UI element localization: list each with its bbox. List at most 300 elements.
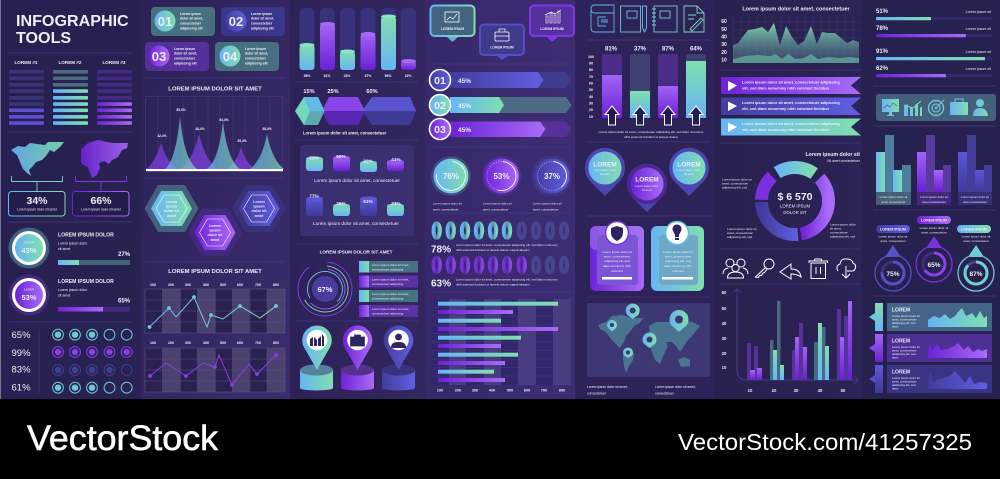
card: security: amet, consectetuer <box>604 254 630 258</box>
progress bars <box>876 9 992 77</box>
panel: small cylinders: 26% <box>336 201 347 206</box>
numbered cards 01-04: consectetuer <box>180 22 202 26</box>
speech bubble: briefcase <box>480 24 524 60</box>
panel: small cylinders: 33% <box>391 201 402 206</box>
arrow bar chart: 60 <box>589 82 593 86</box>
isometric blocks: 60% <box>366 89 378 95</box>
ribbons: Lorem ipsum dolor sit amet, consectetuer adipiscing <box>742 121 840 126</box>
hexagon: purple <box>188 209 242 256</box>
drop gauge 87% <box>957 225 994 291</box>
ribbons: elit, sed diam nonummy nibh euismod tincidun <box>742 127 830 132</box>
numbered cards 01-04: adipiscing elit <box>180 26 203 30</box>
cylinder chart: 33% <box>344 74 350 78</box>
card: security <box>590 222 644 291</box>
drop gauge 65%: Lorem ipsum dolor sit <box>920 226 948 230</box>
map callout: north america 34%: 34% <box>26 195 48 207</box>
area chart: 40 <box>721 34 727 40</box>
arrow bar chart <box>588 46 706 139</box>
arrow bar chart: 87% <box>662 46 675 52</box>
legend boxes: Lorem ipsum dolor sit amet, <box>372 292 409 296</box>
peak chart: 64,4% <box>219 118 229 122</box>
donut $6 570: sit amet, <box>830 226 842 230</box>
horizontal bar chart: 100 <box>437 388 443 392</box>
area row: teal: amet, consectetuer <box>892 318 917 322</box>
line chart: teal <box>145 269 285 333</box>
isometric blocks <box>295 89 416 136</box>
ribbons: elit, sed diam nonummy nibh euismod tincidun <box>742 106 830 111</box>
arrow bars 01-03: 45% <box>458 78 471 85</box>
panel: small cylinders: 66% <box>336 154 347 159</box>
line chart: teal: 800 <box>273 283 279 287</box>
horizontal bar chart: 300 <box>472 388 478 392</box>
panel: stacked lorem bars: LOREM #1 <box>15 60 38 65</box>
horizontal bar chart: 800 <box>559 388 565 392</box>
grouped bar chart: 20 <box>772 388 777 393</box>
area row: teal: LOREM <box>892 308 910 314</box>
speech bubble: briefcase: LOREM IPSUM <box>490 46 514 50</box>
hexagon: purple: amet <box>211 238 220 242</box>
numbered cards 01-04: 04 <box>223 49 238 64</box>
radial chart 67%: LOREM IPSUM DOLOR SIT AMET <box>320 250 393 254</box>
dividers <box>8 40 996 322</box>
hexagon: purple: Lorem <box>209 224 221 228</box>
legend boxes <box>359 261 418 317</box>
line chart: teal: LOREM IPSUM DOLOR SIT AMET <box>168 269 262 275</box>
peak chart: 42,4% <box>157 134 167 138</box>
arrow bars 01-03: 45% <box>458 103 471 110</box>
arrow bar chart: 90 <box>589 62 593 66</box>
map captions: Lorem ipsum dolor sit amet, <box>587 385 628 389</box>
drop gauge 87%: LOREM IPSUM <box>961 228 987 232</box>
area row: blue <box>869 365 992 393</box>
donut stat 43%: LOREM IPSUM DOLOR <box>58 232 114 238</box>
world map panel <box>587 303 710 377</box>
grouped bar chart: 30 <box>794 388 799 393</box>
area chart <box>721 6 860 64</box>
ribbons: elit, sed diam nonummy nibh euismod tincidun <box>742 86 830 90</box>
donut stat 43%: Lorem ipsum dolor <box>58 242 88 246</box>
map callout: eurasia 66%: 66% <box>90 195 112 207</box>
cylinder chart: 16% <box>405 74 411 78</box>
card: idea: diam nonummy nibh <box>664 264 692 268</box>
isometric blocks: Lorem ipsum dolor sit amet, consectetuer <box>303 130 387 136</box>
pin badges: Lorem ipsum dolor <box>677 168 701 172</box>
panel: stacked lorem bars <box>9 60 132 125</box>
drop gauge 65%: LOREM IPSUM <box>921 219 947 223</box>
donut stat 53%: 65% <box>118 298 131 304</box>
map captions: consectetuer <box>587 392 607 396</box>
speech bubble: presentation: LOREM IPSUM <box>441 27 464 31</box>
horizontal bar chart: 600 <box>524 388 530 392</box>
numbered cards 01-04 <box>145 7 285 71</box>
drop gauge 75%: Lorem ipsum dolor sit <box>879 234 908 238</box>
panel: small cylinders: Lorem ipsum dolor sit amet, consectetuer <box>313 221 399 226</box>
cylinder chart: 38% <box>304 74 310 78</box>
donut $6 570: Lorem ipsum dolor sit <box>727 227 757 231</box>
pin badges: LOREM <box>635 176 659 184</box>
area row: blue: LOREM <box>892 370 910 376</box>
donut $6 570: adipiscing elit, sed <box>727 235 753 239</box>
numbered cards 01-04: consectetuer <box>251 22 273 26</box>
progress bars: 51% <box>876 9 889 15</box>
area row: purple <box>869 334 992 362</box>
numbered cards 01-04: dolor sit amet, <box>174 52 197 56</box>
area row: teal: Lorem ipsum dolor sit <box>892 314 920 318</box>
line chart: purple: 500 <box>220 341 226 345</box>
pin badges: Lorem ipsum dolor <box>593 168 617 172</box>
pin badges: sit amet <box>684 172 694 176</box>
arrow bars 01-03: 01 <box>434 75 446 87</box>
grouped bar chart: 60 <box>722 290 727 295</box>
donut $6 570: Lorem ipsum dolor sit <box>722 178 752 182</box>
arrow bars 01-03 <box>430 70 572 140</box>
speech bubble: presentation <box>430 6 474 42</box>
progress bars: Lorem ipsum sit <box>966 27 991 31</box>
pin badges: sit amet <box>600 172 610 176</box>
donut $6 570: $ 6 570 <box>777 191 813 203</box>
watermark band <box>0 399 1000 479</box>
area chart: 60 <box>721 19 727 25</box>
numbered cards 01-04: Lorem ipsum <box>251 12 272 16</box>
area row: purple: Lorem ipsum dolor sit <box>892 345 920 349</box>
legend boxes: Lorem ipsum dolor sit amet, <box>372 278 409 282</box>
progress circles: 76% <box>443 172 459 181</box>
ribbons: Lorem ipsum dolor sit amet, consectetuer adipiscing <box>742 80 840 84</box>
cylinder chart: 67% <box>365 74 371 78</box>
hexagon: blue: amet <box>255 214 264 218</box>
progress bars: Lorem ipsum sit <box>966 50 991 54</box>
ring rating 63%: Lorem ipsum dolor sit amet, consectetuer adipiscing elit, sed diam nonummy <box>456 278 558 282</box>
pin badges: sit amet <box>642 188 652 192</box>
donut $6 570: Sit amet consectetuer <box>827 159 861 163</box>
grouped bar chart: 20 <box>722 351 727 356</box>
arrow bar chart: 40 <box>589 95 593 99</box>
line chart: teal: 200 <box>168 283 174 287</box>
hexagon: purple: dolor sit <box>208 233 223 237</box>
drop gauge 75%: LOREM IPSUM <box>880 228 906 232</box>
hexagon: blue: ipsum <box>253 204 265 208</box>
progress circles: amet, consectetuer <box>433 208 459 212</box>
isometric blocks: 25% <box>327 89 339 95</box>
progress bars: 62% <box>876 66 889 72</box>
horizontal bar chart: 700 <box>541 388 547 392</box>
drop gauge 75%: amet, consectetuer <box>880 239 906 243</box>
area row: purple: adipiscing elit, sed <box>892 352 916 356</box>
hexagon: teal: ipsum <box>166 204 178 208</box>
line chart: teal: 100 <box>150 283 156 287</box>
donut stat 53%: Lorem <box>24 288 34 292</box>
horizontal bar chart: 400 <box>489 388 495 392</box>
map callout: eurasia 66%: Lorem ipsum dolor sit amet <box>81 208 121 212</box>
peak chart: 35,4% <box>237 139 247 143</box>
bar groups with captions: Lorem ipsum dolor sit <box>920 195 948 199</box>
watermark band: VectorStock <box>27 419 219 458</box>
bar groups with captions: Lorem ipsum dolor sit <box>961 195 989 199</box>
donut stat 43%: sit amet <box>58 247 70 251</box>
arrow bar chart: 30 <box>589 102 593 106</box>
ribbons: Lorem ipsum dolor sit amet, consectetuer adipiscing <box>742 100 840 105</box>
hexagon: blue: Lorem <box>253 200 265 204</box>
panel: small cylinders: 32% <box>363 158 374 164</box>
progress circles: Lorem ipsum dolor sit <box>533 202 562 206</box>
line chart: purple <box>145 341 285 392</box>
hexagon: teal <box>144 185 198 232</box>
hexagon: teal: amet <box>167 214 177 218</box>
arrow bars 01-03: 45% <box>458 127 471 134</box>
arrow bar chart: 37% <box>634 46 647 52</box>
icon row: people key arrow trash cloud <box>723 259 856 279</box>
ribbons <box>721 77 861 136</box>
card: idea: amet, consectetuer <box>665 254 691 258</box>
arrow bar chart: 81% <box>605 46 618 52</box>
panel: stacked lorem bars: LOREM #3 <box>103 60 126 65</box>
grouped bar chart: 30 <box>722 336 727 341</box>
area chart: 30 <box>721 42 727 48</box>
title <box>16 12 129 47</box>
donut stat 43% <box>8 228 131 268</box>
line chart: teal: 300 <box>185 283 191 287</box>
bar groups with captions: amet consectetuer <box>882 200 905 204</box>
dot rating rows: 61% <box>12 382 31 394</box>
radial chart 67% <box>296 250 393 318</box>
ring rating 63%: nibh euismod tincidunt ut laoreet dolore magna aliquam <box>456 282 530 286</box>
hexagon: blue <box>232 185 286 232</box>
drop gauge 87%: Lorem ipsum dolor sit <box>962 234 990 238</box>
card: security: euismod <box>611 269 623 273</box>
progress bars: 78% <box>876 26 889 32</box>
drop gauge 87%: amet, consectetuer <box>963 239 989 243</box>
cylinder chart <box>300 8 416 78</box>
peak chart <box>146 86 284 171</box>
donut $6 570: consectetuer <box>830 230 848 234</box>
drop gauge 65%: 65% <box>927 262 941 269</box>
area row: teal <box>869 303 992 331</box>
bar groups with captions: amet consectetuer <box>963 200 987 204</box>
arrow bar chart: 70 <box>589 75 593 79</box>
hexagon: teal: Lorem <box>166 200 178 204</box>
numbered cards 01-04: consectetuer <box>245 56 267 60</box>
hexagon: teal: dolor sit <box>164 209 180 213</box>
location pin cylinders <box>300 326 415 390</box>
ring rating 63%: 63% <box>431 278 451 290</box>
panel: stacked lorem bars: LOREM #2 <box>59 60 82 65</box>
donut $6 570: amet, consectetuer <box>727 231 753 235</box>
donut $6 570: LOREM IPSUM <box>780 204 810 208</box>
donut $6 570: Lorem ipsum dolor <box>830 222 856 226</box>
arrow bars 01-03: 03 <box>434 124 446 136</box>
numbered cards 01-04: dolor sit amet, <box>251 16 274 20</box>
peak chart: 58,4% <box>262 127 272 131</box>
drop gauge 65%: amet, consectetuer <box>921 230 947 234</box>
line chart: teal: 600 <box>237 283 243 287</box>
icons: books and notes <box>591 5 704 32</box>
cylinder chart: 96% <box>385 74 391 78</box>
ring rating 78%: 78% <box>431 244 451 256</box>
area row: purple: amet, consectetuer <box>892 348 917 352</box>
panel: small cylinders: Lorem ipsum dolor sit amet, consectetuer <box>314 178 400 183</box>
numbered cards 01-04: Lorem ipsum <box>174 47 195 51</box>
numbered cards 01-04: 01 <box>158 14 172 29</box>
progress bars: Lorem ipsum sit <box>966 67 991 71</box>
dot rating rows <box>12 329 132 394</box>
line chart: teal: 500 <box>220 283 226 287</box>
watermark band: VectorStock.com/41257325 <box>678 429 972 455</box>
progress circles: Lorem ipsum dolor sit <box>433 202 462 206</box>
horizontal bar chart: 500 <box>507 388 513 392</box>
drop gauge 87%: 87% <box>969 271 983 278</box>
map captions: consectetuer <box>655 392 675 396</box>
numbered cards 01-04: Lorem ipsum <box>245 47 266 51</box>
numbered cards 01-04: 02 <box>229 14 243 29</box>
ring rating 63% <box>431 258 567 290</box>
horizontal bar chart <box>431 299 571 392</box>
line chart: purple: 400 <box>203 341 209 345</box>
speech bubble: chart <box>530 6 574 42</box>
pin badges: LOREM <box>593 162 617 168</box>
ring rating 78% <box>431 223 567 256</box>
area chart: 20 <box>721 50 727 56</box>
progress bars: Lorem ipsum sit <box>966 10 991 14</box>
arrow bar chart: 20 <box>589 108 593 112</box>
horizontal bar chart: 200 <box>455 388 461 392</box>
dot rating rows: 83% <box>12 364 31 376</box>
map callout: north america 34% <box>8 142 65 216</box>
numbered cards 01-04: adipiscing elit <box>174 62 197 66</box>
area row: blue: diam <box>892 386 899 390</box>
grouped bar chart: 10 <box>748 388 753 393</box>
donut stat 43%: 27% <box>118 252 131 258</box>
donut $6 570: DOLOR SIT <box>783 210 807 215</box>
arrow bar chart: 80 <box>589 68 593 72</box>
title: INFOGRAPHIC <box>16 12 129 30</box>
drop gauge 65% <box>916 216 952 282</box>
donut stat 43%: 43% <box>21 246 37 255</box>
line chart: teal: 700 <box>255 283 261 287</box>
numbered cards 01-04: dolor sit amet, <box>180 16 203 20</box>
area row: teal: diam <box>892 324 899 328</box>
panel: small cylinders <box>300 145 414 236</box>
progress circles: amet, consectetuer <box>533 208 559 212</box>
card: security: adipiscing elit, sed <box>604 259 630 263</box>
donut $6 570 <box>722 152 861 239</box>
card: security: Lorem ipsum dolor sit <box>602 250 632 254</box>
isometric blocks: 15% <box>303 89 315 95</box>
arrow bar chart: 100 <box>588 55 594 59</box>
area row: purple: LOREM <box>892 338 910 344</box>
legend boxes: consectetuer adipiscing <box>372 282 404 286</box>
line chart: purple: 200 <box>168 341 174 345</box>
arrow bars 01-03: 02 <box>434 100 446 112</box>
numbered cards 01-04: Lorem ipsum <box>180 12 201 16</box>
area row: purple: diam <box>892 356 899 360</box>
donut stat 53%: LOREM IPSUM DOLOR <box>58 279 114 285</box>
arrow bar chart: nibh euismod tincidunt ut laoreet dolore <box>624 135 678 139</box>
area row: teal: adipiscing elit, sed <box>892 321 916 325</box>
cylinder chart: 81% <box>324 74 330 78</box>
area row: blue: adipiscing elit, sed <box>892 383 916 387</box>
hexagon: blue: dolor sit <box>252 209 267 213</box>
legend boxes: Lorem ipsum dolor sit amet, <box>372 263 409 267</box>
pin badges: LOREM <box>677 162 701 168</box>
peak chart: 48,4% <box>195 127 205 131</box>
map captions: Lorem ipsum dolor sit amet, <box>655 385 696 389</box>
panel: small cylinders: 41% <box>391 157 402 162</box>
bar groups with captions: amet consectetuer <box>922 200 946 204</box>
line chart: purple: 300 <box>185 341 191 345</box>
grouped bar chart: 50 <box>841 388 846 393</box>
map callout: north america 34%: Lorem ipsum dolor sit amet <box>17 208 57 212</box>
pin badges: Lorem ipsum dolor <box>635 184 659 188</box>
area chart: 50 <box>721 27 727 33</box>
progress circles <box>431 156 572 212</box>
panel: small cylinders: 61% <box>363 199 374 204</box>
line chart: purple: 100 <box>150 341 156 345</box>
card: idea: adipiscing elit, sed <box>665 259 691 263</box>
grouped bar chart: 40 <box>722 321 727 326</box>
progress bars: 91% <box>876 49 889 55</box>
map callout: eurasia 66% <box>72 140 129 216</box>
card: idea: euismod <box>672 269 684 273</box>
icon panel <box>876 94 996 121</box>
donut $6 570: Lorem ipsum dolor sit <box>806 152 860 158</box>
legend boxes: consectetuer adipiscing <box>372 296 404 300</box>
numbered cards 01-04: 03 <box>152 49 166 64</box>
arrow bar chart: 10 <box>589 115 593 119</box>
progress circles: 37% <box>544 172 560 181</box>
arrow bar chart: 50 <box>589 88 593 92</box>
panel: small cylinders: 77% <box>309 194 320 198</box>
area row: blue: Lorem ipsum dolor sit <box>892 376 920 380</box>
peak chart: LOREM IPSUM DOLOR SIT AMET <box>168 86 262 92</box>
line chart: purple: 600 <box>237 341 243 345</box>
numbered cards 01-04: dolor sit amet, <box>245 52 268 56</box>
donut $6 570: adipiscing elit, sed <box>830 234 856 238</box>
legend boxes: consectetuer adipiscing <box>372 268 404 272</box>
drop gauge 75%: 75% <box>886 271 900 278</box>
progress circles: Lorem ipsum dolor sit <box>483 202 512 206</box>
line chart: teal: 400 <box>203 283 209 287</box>
map captions <box>587 385 696 396</box>
pin badges <box>585 148 709 212</box>
grouped bar chart: 50 <box>722 306 727 311</box>
ring rating 78%: nibh euismod tincidunt ut laoreet dolore magna aliquam <box>456 248 530 252</box>
bar groups with captions: Lorem ipsum dolor sit <box>880 195 908 199</box>
card: idea: Lorem ipsum dolor sit <box>663 250 693 254</box>
area chart: 10 <box>721 58 727 64</box>
numbered cards 01-04: adipiscing elit <box>245 62 268 66</box>
speech bubble: chart: LOREM IPSUM <box>540 27 564 31</box>
ring rating 78%: Lorem ipsum dolor sit amet, consectetuer adipiscing elit, sed diam nonummy <box>456 243 558 247</box>
grouped bar chart <box>722 289 858 393</box>
drop gauge 75% <box>875 225 911 291</box>
hexagon: purple: ipsum <box>209 228 221 232</box>
donut stat 43%: Lorem <box>24 240 34 244</box>
card: security: diam nonummy nibh <box>603 264 631 268</box>
arrow bar chart: Lorem ipsum dolor sit amet, consectetuer adipiscing elit, sed diam nonummy <box>599 130 704 134</box>
dot rating rows: 99% <box>12 348 31 359</box>
donut $6 570: amet, consectetuer <box>722 182 748 186</box>
donut stat 53%: sit amet <box>58 294 70 298</box>
radial chart 67%: 67% <box>317 285 333 294</box>
line chart: purple: 700 <box>255 341 261 345</box>
card: idea <box>651 222 704 291</box>
area row: blue: amet, consectetuer <box>892 380 917 384</box>
dot rating rows: 65% <box>12 330 31 341</box>
donut stat 53%: 53% <box>21 293 37 302</box>
donut stat 53%: Lorem ipsum dolor <box>58 288 88 292</box>
grouped bar chart: 40 <box>818 388 823 393</box>
legend boxes: consectetuer adipiscing <box>372 312 404 316</box>
